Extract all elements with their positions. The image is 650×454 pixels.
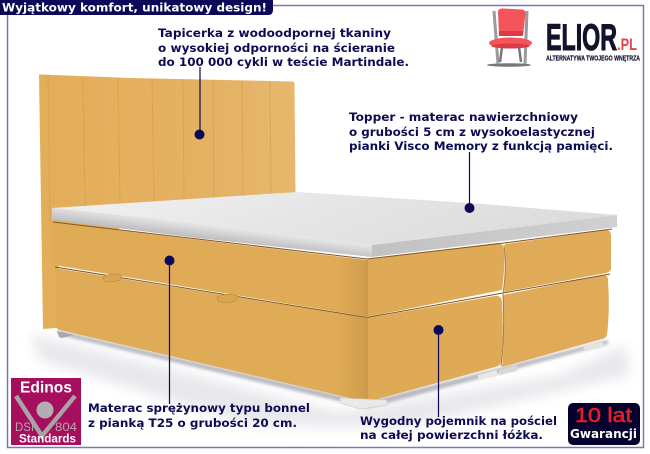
callout: upholstery xyxy=(158,26,409,140)
badge: Edinos Standards: 804 xyxy=(55,420,77,434)
callout: bonnel mattress: Materac sprężynowy typu bonnel xyxy=(88,401,310,415)
callout: upholstery: Tapicerka z wodoodpornej tkaniny xyxy=(158,26,392,40)
callout: topper: Topper - materac nawierzchniowy xyxy=(349,110,579,124)
callout: upholstery: o wysokiej odporności na ścieranie xyxy=(158,41,395,55)
badge: 10 year warranty xyxy=(568,403,640,445)
badge: 10 year warranty: 10 lat xyxy=(575,405,633,427)
badge: Edinos Standards: DSI xyxy=(15,420,34,434)
callout: topper: o grubości 5 cm z wysokoelastycznej xyxy=(349,125,595,139)
badge: Edinos Standards: Standards xyxy=(19,434,76,446)
callout: bonnel mattress xyxy=(88,256,310,430)
badge: 10 year warranty: Gwarancji xyxy=(570,427,637,441)
callout: storage: Wygodny pojemnik na pościel xyxy=(360,414,557,428)
floor shadow xyxy=(30,330,630,428)
callout: storage xyxy=(360,325,557,442)
callout: topper: pianki Visco Memory z funkcją pamięci. xyxy=(349,139,613,153)
pull handles xyxy=(103,274,238,302)
topper left side face xyxy=(52,208,372,257)
upper box, right xyxy=(504,230,611,292)
callout: topper xyxy=(349,110,613,213)
logo: Elior: .PL xyxy=(617,35,637,54)
upper box, left xyxy=(53,223,368,317)
topper right side face xyxy=(372,215,617,257)
topper top face xyxy=(52,192,617,245)
feet xyxy=(57,331,603,409)
box seams xyxy=(53,222,612,402)
logo: Elior xyxy=(487,8,640,67)
lower box, front xyxy=(367,296,503,402)
lower box, right xyxy=(502,275,609,367)
badge: Edinos Standards: Edinos xyxy=(20,380,72,396)
callout: bonnel mattress: z pianką T25 o grubości 20 cm. xyxy=(88,416,297,430)
upper box, front xyxy=(367,243,504,317)
bed illustration xyxy=(30,74,630,428)
callout: upholstery: do 100 000 cykli w teście Martindale. xyxy=(158,55,409,69)
callout: storage: na całej powierzchni łóżka. xyxy=(360,428,543,442)
badge: Edinos Standards xyxy=(11,378,81,446)
headboard xyxy=(39,74,296,329)
icon: red chair xyxy=(487,8,532,67)
heading banner: Wyjątkowy komfort, unikatowy design! xyxy=(2,0,267,14)
lower box, left xyxy=(55,268,367,402)
